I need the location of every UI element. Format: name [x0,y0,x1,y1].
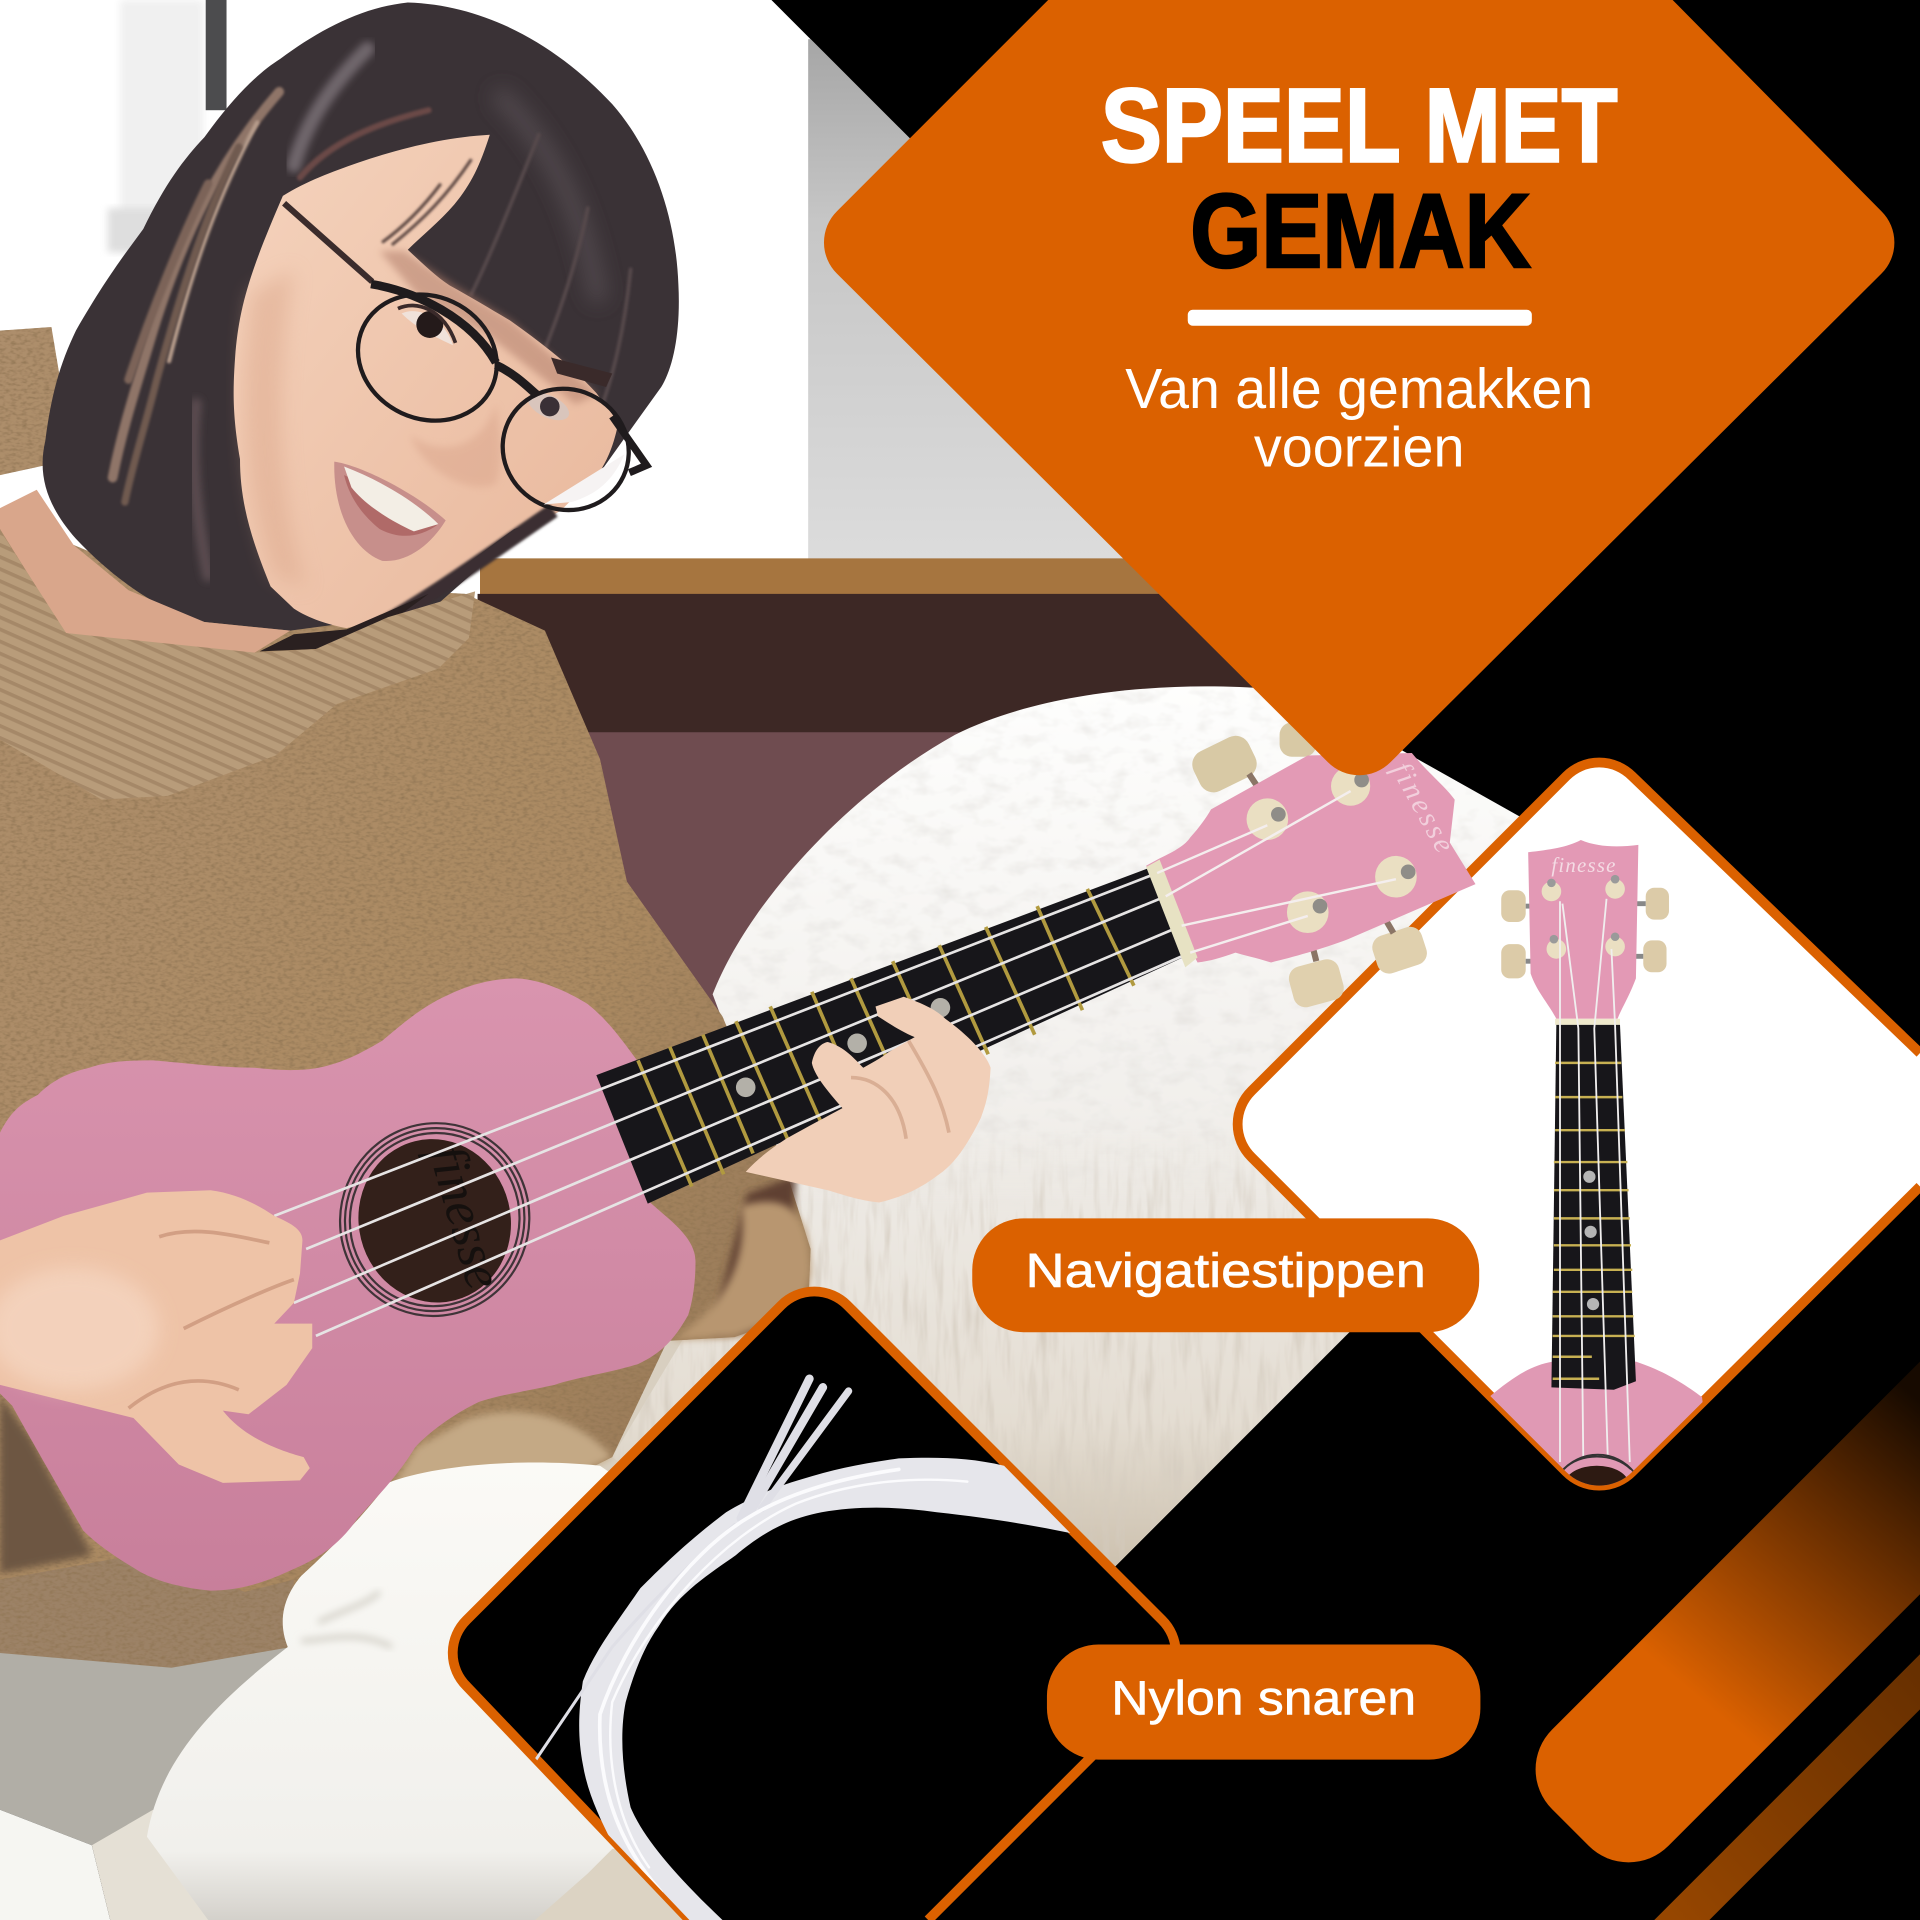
product dots [1583,1171,1599,1310]
pill: Navigatiestippen: Navigatiestippen [1026,1245,1426,1298]
plum sofa cushion [588,732,960,1012]
product strings [1560,899,1630,1462]
under-chin shadow [260,594,429,651]
product nut [1555,1019,1620,1025]
product sound hole [1560,1455,1635,1502]
white knee [147,1462,614,1920]
mouth [334,462,446,561]
product washers [1542,879,1625,959]
product body [1482,1362,1714,1506]
hair highlights [113,49,631,576]
subtitle [1125,357,1593,479]
grey trousers [0,1647,291,1845]
thin gradient stripe [1654,1654,1920,1920]
product pegs [1501,888,1669,978]
brand on headstock: finesse [1385,757,1460,858]
white product diamond with orange border [1238,763,1920,1506]
pill: Nylon snaren [1047,1644,1480,1760]
subtitle: voorzien [1254,416,1464,479]
eyes [398,305,612,426]
ukulele body [0,978,696,1591]
white cuff bottom left [0,1810,110,1920]
sleeve shadow [710,1176,796,1335]
beige blanket below knee [536,1848,681,1920]
washers and posts [1247,767,1417,933]
subtitle: Van alle gemakken [1125,357,1593,420]
nose shadow [410,404,501,487]
nut [1146,860,1198,967]
product brand: finesse [1551,853,1617,877]
black strings diamond with orange border [453,1292,1176,1920]
fleece lining [392,1412,612,1488]
sweater body [0,327,811,1668]
fretting hand [746,997,991,1202]
glasses [284,203,649,531]
window background [0,0,910,600]
divider [1188,310,1532,326]
forehead hair wisps [382,159,471,245]
sound hole rings [311,1095,558,1345]
lower left shadow under ukulele [0,1396,92,1573]
headstock [1146,753,1476,962]
white blanket [712,686,1520,1214]
bangs shadow [380,251,598,404]
product headstock [1528,840,1638,1019]
strings on headstock [1157,791,1396,953]
sleeve cuff [671,1202,811,1340]
lower photo filler [596,1340,1200,1566]
sweater hem [0,1555,294,1671]
label in sound hole: finesse [417,1138,515,1295]
tuning pegs [1187,722,1430,1010]
knit blanket bottom [92,1810,208,1920]
fretboard on body side and strings [274,868,1190,1336]
wooden window sill [480,558,1159,594]
thin hair strand beside chin [378,504,559,616]
knee fold [301,1592,392,1647]
orange title diamond [824,0,1894,775]
woman's hair [43,2,679,631]
neck [0,490,290,653]
grey wall [808,39,1123,558]
product: ukulele neck [1482,840,1714,1506]
woman's face [234,135,618,628]
main ukulele headstock overlapping the panels [1146,722,1476,1010]
picking hand [0,1190,312,1483]
shaggy blanket lower part [613,1151,1350,1566]
pill: Navigatiestippen [972,1218,1479,1332]
dark wood panel [478,594,1254,732]
sweater collar [0,530,475,800]
heading: GEMAK [1190,173,1531,290]
frets [638,889,1134,1187]
pill: Nylon snaren: Nylon snaren [1111,1672,1416,1725]
nylon strings coil [535,1379,1070,1920]
product fretboard [1551,1025,1636,1390]
face shadow left [245,269,306,588]
strings [274,873,1190,1336]
gradient orange band [1536,1362,1920,1862]
loose string ends [535,1379,967,1892]
position dots [736,998,950,1097]
lens reflection [544,454,624,504]
product frets [1553,1063,1635,1379]
heading [1101,68,1618,290]
heading: SPEEL MET [1101,68,1618,185]
sound hole [341,1123,528,1319]
